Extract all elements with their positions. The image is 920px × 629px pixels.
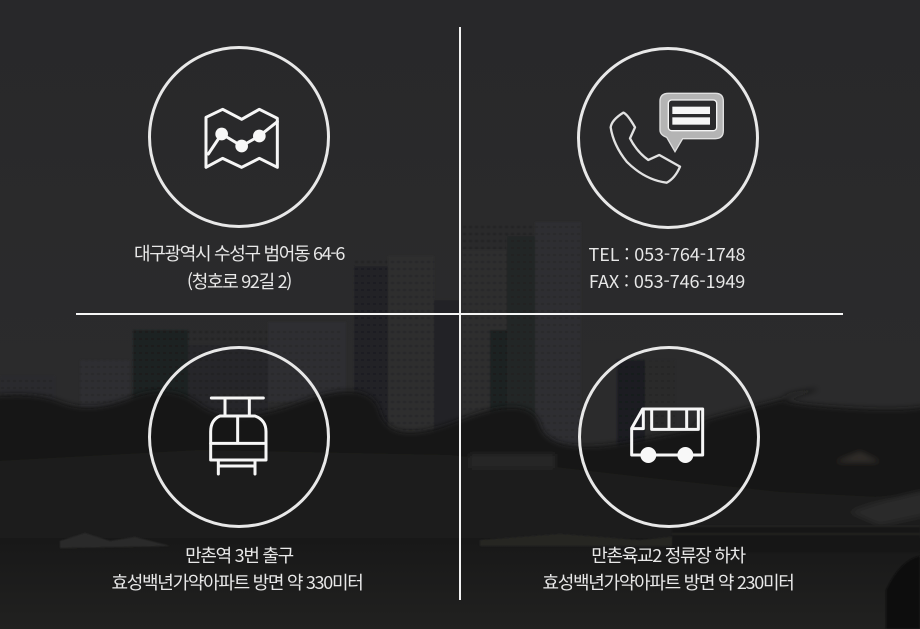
subway exit text: 만촌역 3번 출구 [185,542,294,568]
subway direction text: 효성백년가약아파트 방면 약 330미터 [112,569,362,595]
horizontal divider [76,313,843,315]
icon: map [206,109,277,167]
contact circle [578,48,758,228]
address text: 대구광역시 수성구 범어동 64-6 [134,240,345,266]
panel: subway [112,348,362,595]
bus direction text: 효성백년가약아파트 방면 약 230미터 [543,569,793,595]
panel: address [134,48,345,294]
subway circle [150,348,328,526]
telephone number: TEL : 053-764-1748 [589,241,746,267]
panel: contact [578,48,758,294]
vertical divider [459,27,461,600]
icon: monorail train [211,398,266,474]
bus stop text: 만촌육교2 정류장 하차 [591,542,746,568]
icon: bus [632,409,703,463]
bus circle [580,348,758,526]
road address text: (청호로 92길 2) [187,268,291,294]
fax number: FAX : 053-746-1949 [589,268,745,294]
address circle [150,48,328,226]
panel: bus [543,348,793,595]
icon: phone with speech bubble [611,93,723,183]
